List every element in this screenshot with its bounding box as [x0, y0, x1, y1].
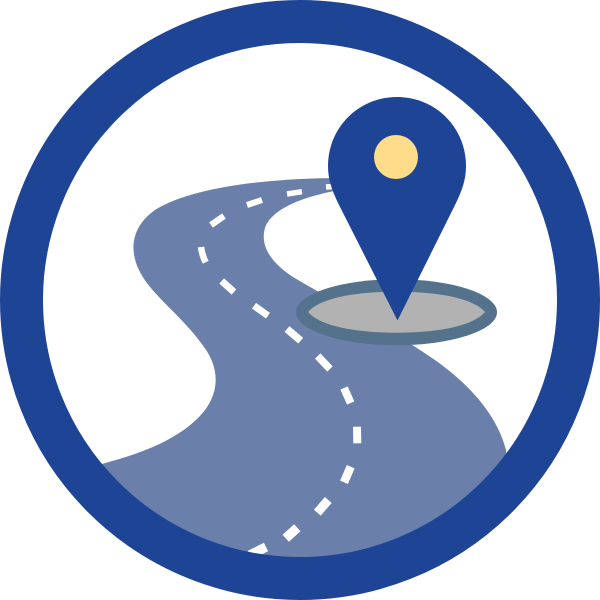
icon: winding road: [102, 178, 506, 557]
road centre dashes: [201, 186, 357, 555]
pin centre dot: [374, 135, 418, 179]
icon: map pin: [328, 97, 466, 320]
target ellipse: [296, 279, 497, 345]
